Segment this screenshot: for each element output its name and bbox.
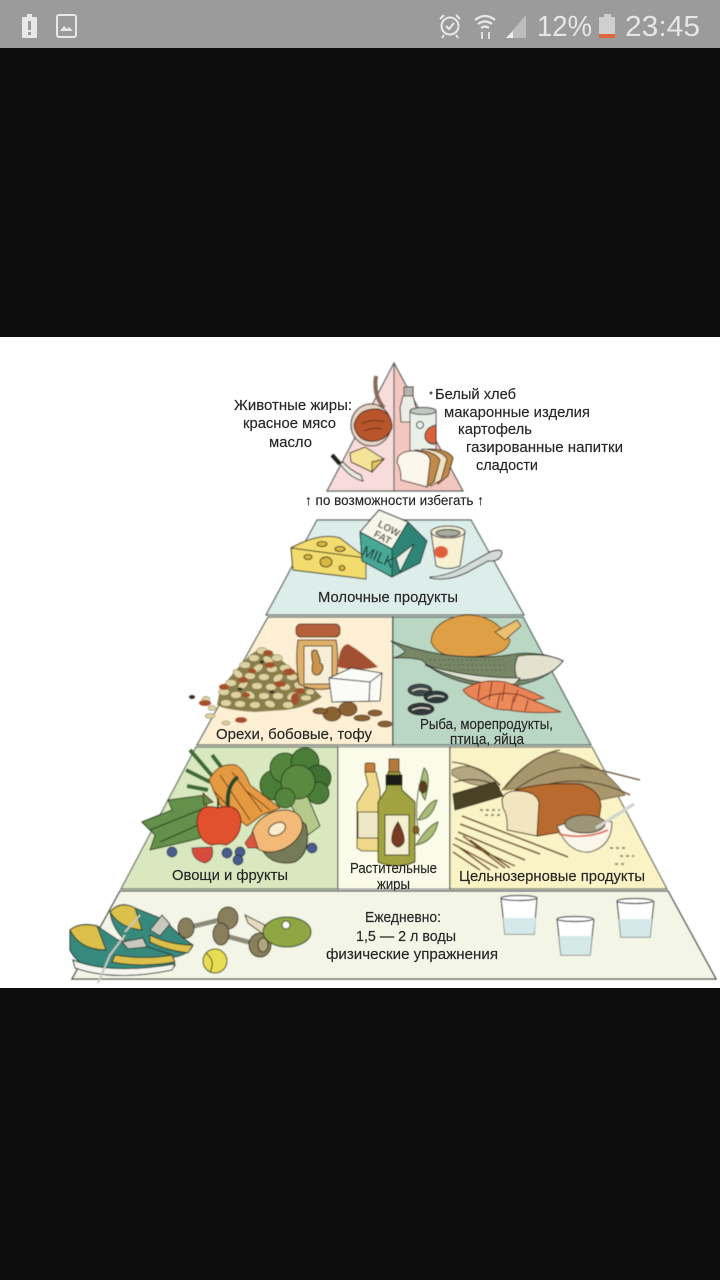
label: fish [420, 716, 553, 748]
icon: alarm clock [440, 15, 460, 38]
text: animal fats: красное мясо [243, 415, 336, 432]
carton label: fat: FAT [372, 529, 393, 547]
text: animal fats: масло [269, 434, 312, 451]
icon: wheat sheaf [452, 750, 640, 810]
icon: berries [167, 832, 317, 865]
text: daily recommendations: Ежедневно: [365, 909, 441, 926]
icon: butter and knife [332, 447, 384, 481]
icon: cheese [291, 536, 366, 579]
icon: grain bowl [557, 804, 634, 852]
icon: salmon fillets [463, 681, 561, 713]
icon: battery alert [22, 14, 37, 38]
icon: olive branch [413, 768, 438, 845]
label: oils: Растительные [350, 860, 437, 877]
icon: pasta sticks [453, 816, 568, 870]
label: nuts: Орехи, бобовые, тофу [216, 726, 372, 743]
label: oils: жиры [377, 876, 410, 893]
white image band [0, 337, 720, 988]
icon: back sneaker [110, 905, 193, 958]
icon: olive oil bottle [378, 759, 415, 866]
text: daily recommendations [326, 909, 498, 963]
icon: milk carton [359, 510, 427, 577]
label: fish: птица, яйца [450, 731, 525, 748]
icon: apple [197, 793, 241, 845]
icon: peanut butter jar [296, 624, 340, 689]
label: fish: Рыба, морепродукты, [420, 716, 553, 733]
text: daily recommendations: физические упражнения [326, 946, 498, 963]
icon: melon [244, 802, 310, 863]
icon: nut pile [189, 648, 392, 727]
text: refined carbs: макаронные изделия [444, 404, 590, 421]
panel: vegetable oils [338, 747, 450, 889]
icon: water glass 1 [501, 896, 537, 934]
icon: red meat [351, 376, 392, 446]
panel: daily water and exercise [70, 891, 716, 983]
label: oils [350, 860, 437, 893]
label: vegetables: Овощи и фрукты [172, 867, 288, 884]
icon: tennis ball [203, 949, 227, 973]
icon: tofu [329, 668, 382, 702]
icon: loose grains [480, 810, 634, 864]
icon: water glass 3 [617, 898, 654, 937]
carton label: low fat: LOW [376, 519, 402, 540]
battery percent: 12% [537, 11, 592, 43]
text: refined carbs: картофель [458, 421, 532, 438]
icon: broccoli [260, 748, 331, 835]
icon: sliced bread [397, 449, 453, 487]
panel: fish and poultry [391, 615, 591, 745]
text: daily recommendations: 1,5 — 2 л воды [356, 928, 456, 945]
text: avoid if possible: ↑ по возможности избегать ↑ [305, 492, 484, 508]
icon: water glass 2 [557, 916, 594, 955]
panel: nuts and legumes [189, 617, 393, 745]
icon: wifi [475, 16, 495, 39]
clock: 23:45 [625, 11, 700, 43]
icon: signal [506, 15, 526, 38]
icon: dumbbells [178, 907, 271, 957]
icon: roast chicken [431, 615, 521, 657]
panel: vegetables and fruits [121, 747, 338, 889]
icon: fish [391, 641, 563, 688]
icon: front sneaker [70, 915, 175, 983]
icon: ground spice [338, 644, 378, 670]
text: animal fats: Животные жиры: [234, 397, 352, 414]
text: refined carbs: Белый хлеб [435, 386, 516, 403]
label: dairy: Молочные продукты [318, 589, 458, 606]
text: refined carbs [430, 386, 623, 474]
icon: yogurt and spoon [430, 526, 502, 579]
carton label: milk: MILK [359, 543, 396, 572]
status bar [0, 0, 720, 48]
label: grains: Цельнозерновые продукты [459, 868, 645, 885]
icon: carrots [186, 750, 280, 826]
food pyramid [70, 363, 716, 983]
panel: avoid triangle [327, 363, 463, 491]
icon: sunflower oil bottle [357, 763, 380, 851]
icon: image [57, 15, 76, 37]
icon: leafy greens [142, 795, 212, 850]
panel: dairy [266, 510, 524, 615]
icon: bottle and can [400, 387, 436, 452]
icon: mussels [408, 684, 448, 715]
icon: battery low [599, 14, 615, 38]
text: refined carbs: сладости [476, 457, 538, 474]
text: refined carbs: газированные напитки [466, 439, 623, 456]
text: animal fats [234, 397, 352, 451]
icon: loaf of bread [502, 784, 601, 836]
icon: table tennis paddle [245, 915, 311, 947]
panel: whole grains [450, 747, 667, 889]
